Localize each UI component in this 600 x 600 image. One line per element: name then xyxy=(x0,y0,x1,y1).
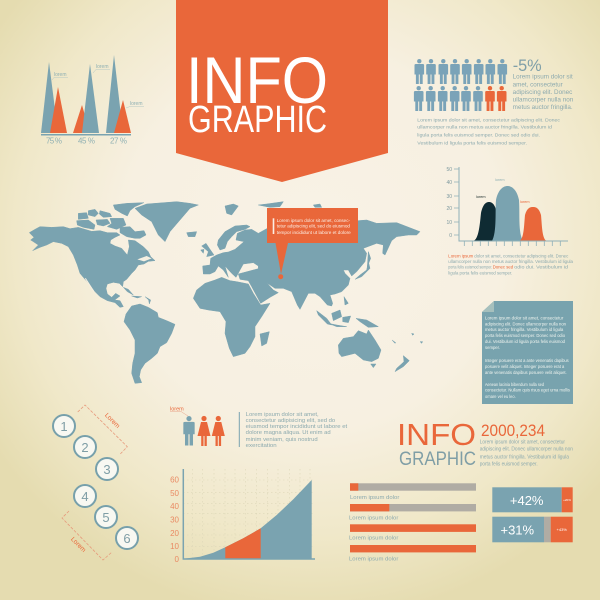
note panel: adipiscing elit. Donec ullamcorper nulla non xyxy=(485,321,566,326)
percent boxes: +42% xyxy=(510,493,544,508)
numbered circles: 1 xyxy=(60,419,68,434)
bell chart: 20 xyxy=(446,206,452,212)
area chart xyxy=(170,469,315,564)
bell chart: 0 xyxy=(449,233,452,239)
people pictogram xyxy=(414,59,507,111)
numbered circles: 4 xyxy=(81,489,89,504)
title banner: GRAPHIC xyxy=(188,99,327,141)
percent stat text: Lorem ipsum dolor sit amet, consectetur adipiscing elit. Donec xyxy=(417,117,561,123)
percent stat text: -5% xyxy=(513,56,542,75)
triangle chart: 75 % xyxy=(46,136,62,146)
title banner: INFO xyxy=(186,43,328,117)
bell chart: 10 xyxy=(446,220,452,226)
numbered circles: Lorem xyxy=(69,536,87,554)
bell chart caption xyxy=(448,253,573,275)
area chart: 10 xyxy=(170,542,180,551)
note panel: posuere velit aliquet. Integer posuere erat a xyxy=(485,364,565,369)
area chart: 20 xyxy=(170,529,180,538)
bell chart: 40 xyxy=(446,180,452,186)
triangle chart: 27 % xyxy=(110,136,127,146)
gender text block: dolore magna aliqua. Ut enim ad xyxy=(246,430,331,436)
eurasia and africa xyxy=(193,202,423,372)
gender text block: minim veniam, quis nostrud xyxy=(246,437,318,443)
triangle chart: lorem xyxy=(96,64,109,70)
area chart: 50 xyxy=(170,489,180,498)
secondary title xyxy=(397,417,573,470)
secondary title: Lorem ipsum dolor sit amet, consectetur xyxy=(480,440,565,446)
percent stat text: amet, consectetur xyxy=(513,82,563,88)
gender icons: lorem xyxy=(170,406,184,412)
title banner xyxy=(176,0,388,182)
progress bars: Lorem ipsum dolor xyxy=(349,556,398,562)
note panel: consectetur. Nullam quis risus eget urna mollis xyxy=(485,388,571,393)
gender text block: consectetur adipisicing elit, sed do xyxy=(246,418,335,424)
secondary title: GRAPHIC xyxy=(399,449,476,470)
map callout: Lorem ipsum dolor sit amet, consec- xyxy=(277,218,350,224)
note panel: metus auctor fringilla. Vestibulum id ligula xyxy=(485,327,564,332)
map callout xyxy=(267,208,358,279)
bell chart caption: Donec sed xyxy=(493,265,514,270)
numbered circles: 5 xyxy=(102,510,110,525)
secondary title: INFO xyxy=(397,417,476,452)
bell chart caption: porta felis euismod semper. xyxy=(448,265,492,270)
area chart: 40 xyxy=(170,502,180,511)
note panel: dui. Vestibulum id ligula porta felis euismod xyxy=(485,339,565,344)
percent stat text: ullamcorper nulla non xyxy=(513,97,573,103)
bell chart caption: dolor sit amet, consectetur adipiscing elit. Donec xyxy=(474,253,569,258)
percent stat text: ullamcorper nulla non metus auctor fringilla. Vestibulum id xyxy=(417,124,552,130)
note panel: Lorem ipsum dolor sit amet, consectetur xyxy=(485,315,564,320)
area chart: 0 xyxy=(175,555,180,564)
percent boxes: +20% xyxy=(563,498,571,502)
secondary title: porta felis euismod semper. xyxy=(480,461,538,467)
secondary title: metus auctor fringilla. Vestibulum id ligula xyxy=(480,454,569,460)
bell chart: lorem xyxy=(476,195,486,199)
triangle chart: 45 % xyxy=(78,136,95,146)
note panel: semper. xyxy=(485,345,500,350)
numbered circles xyxy=(53,405,138,560)
progress bars: Lorem ipsum dolor xyxy=(349,536,398,542)
secondary title: 2000,234 xyxy=(481,421,545,440)
progress bars xyxy=(349,483,476,562)
americas xyxy=(29,202,198,383)
note panel: Aenean lacinia bibendum nulla sed xyxy=(485,382,544,387)
numbered circles: 6 xyxy=(123,531,131,546)
percent boxes: +31% xyxy=(500,522,535,537)
note panel: ante venenatis dapibus posuere velit aliquet. xyxy=(485,370,567,375)
bell chart caption: odio dui. Vestibulum id xyxy=(514,265,569,270)
percent stat text: metus auctor fringilla. xyxy=(513,105,573,111)
progress bars: Lorem ipsum dolor xyxy=(350,495,399,501)
gender text block: Lorem ipsum dolor sit amet, xyxy=(246,412,319,418)
numbered circles: 2 xyxy=(81,440,89,455)
world map xyxy=(29,202,423,383)
secondary title: adipiscing elit. Donec ullamcorper nulla non xyxy=(480,447,573,453)
bell chart caption: Lorem ipsum xyxy=(448,253,473,258)
triangle chart xyxy=(41,55,144,146)
percent stat text: Lorem ipsum dolor sit xyxy=(513,74,573,80)
bell chart: lorem xyxy=(495,178,504,182)
bell chart caption: ligula porta felis euismod semper. xyxy=(448,270,512,275)
map callout: tetur adipiscing elit, sed do eiusmod xyxy=(277,224,350,230)
note panel: porta felis euismod semper. Donec sed odio xyxy=(485,333,565,338)
triangle chart: lorem xyxy=(130,101,143,107)
gender text block: eiusmod tempor incididunt ut labore et xyxy=(246,424,348,430)
note panel: Integer posuere erat a ante venenatis dapibus xyxy=(485,358,569,363)
percent stat text xyxy=(417,56,573,146)
gender text block: exercitation xyxy=(246,443,277,449)
note panel: ornare vel eu leo. xyxy=(485,394,516,399)
bell chart: lorem xyxy=(520,200,530,204)
triangle chart: lorem xyxy=(54,72,67,78)
note panel xyxy=(482,301,573,404)
percent boxes: +43% xyxy=(557,527,567,532)
percent stat text: adipiscing elit. Donec xyxy=(513,90,572,96)
bell chart: 30 xyxy=(446,194,452,200)
numbered circles: 3 xyxy=(103,462,111,477)
map callout: tempor incididunt ut labore et dolore xyxy=(277,230,351,236)
gender icons xyxy=(170,406,225,446)
bell chart xyxy=(446,167,568,246)
bell chart: 50 xyxy=(446,167,452,173)
percent stat text: Vestibulum id ligula porta felis euismod semper. xyxy=(417,140,527,146)
percent boxes xyxy=(492,487,573,542)
area chart: 60 xyxy=(170,476,180,484)
bell chart caption: ullamcorper nulla non metus auctor fringilla. Vestibulum id ligula xyxy=(448,259,573,264)
area chart: 30 xyxy=(170,515,180,524)
percent stat text: ligula porta felis euismod semper. Donec sed odio dui. xyxy=(417,132,540,138)
gender text block xyxy=(239,412,348,449)
progress bars: Lorem ipsum dolor xyxy=(349,515,398,521)
numbered circles: Lorem xyxy=(103,412,121,430)
